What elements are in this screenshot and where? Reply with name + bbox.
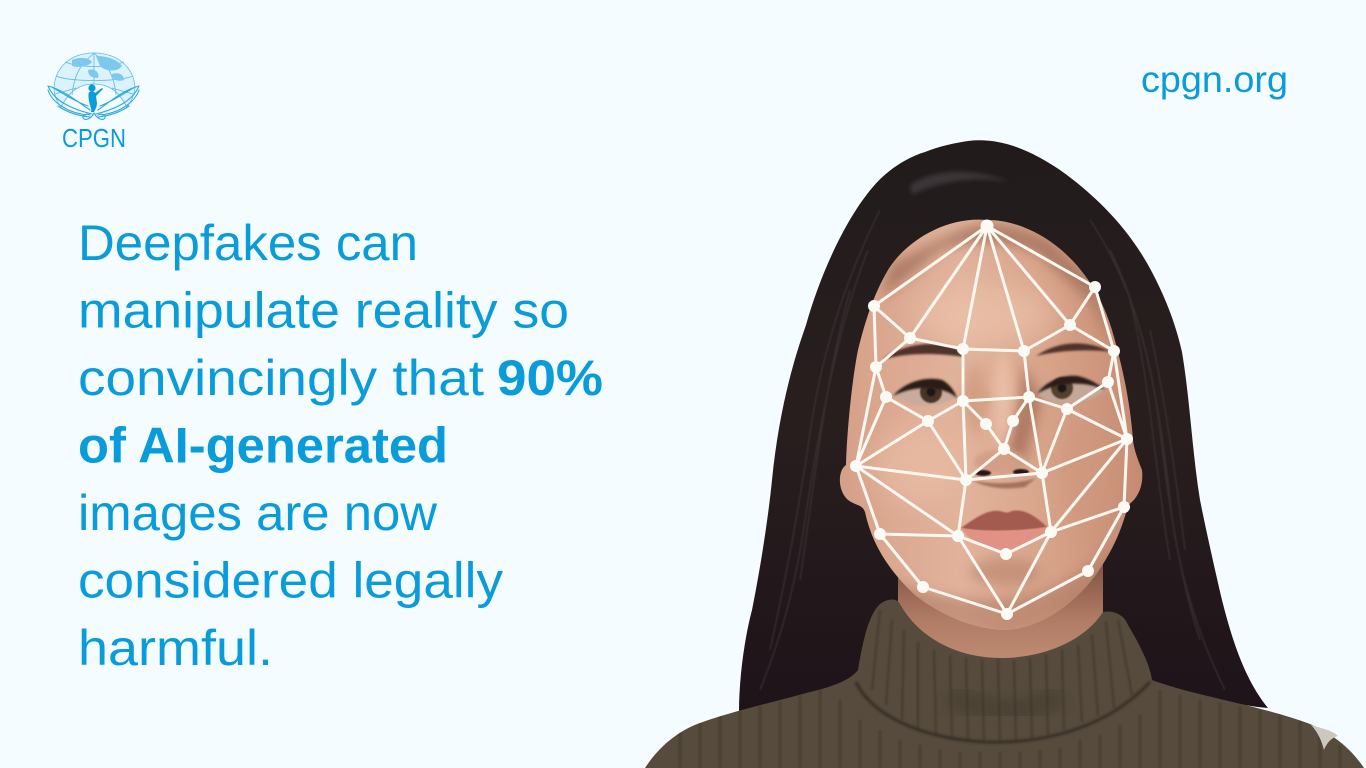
- headline text block: considered legally: [78, 552, 503, 608]
- sweater: [645, 600, 1364, 768]
- eyes: [894, 388, 956, 406]
- headline text block: images are now: [78, 485, 438, 541]
- watermark sparkle: [1311, 725, 1338, 750]
- headline text block: of AI-generated: [78, 418, 448, 474]
- icon: globe: [54, 53, 135, 107]
- facial recognition mesh: [850, 220, 1133, 620]
- icon: child figure: [88, 84, 103, 112]
- neck: [898, 560, 1103, 660]
- headline text block: [78, 215, 603, 676]
- mesh nodes: [850, 220, 1133, 620]
- portrait of a woman: [645, 140, 1364, 768]
- site url: cpgn.org: [1141, 59, 1288, 100]
- headline text block: convincingly that: [78, 350, 484, 406]
- skin shading: [915, 285, 1055, 345]
- headline text block: harmful.: [78, 620, 273, 676]
- logo wordmark: CPGN: [62, 123, 126, 153]
- face: [840, 220, 1142, 640]
- headline text block: 90%: [497, 350, 603, 406]
- lips: [961, 510, 1047, 531]
- hair: [739, 140, 1268, 712]
- eyebrows: [882, 344, 964, 360]
- logo: CPGN globe with wings: [48, 53, 139, 153]
- headline text block: Deepfakes can: [78, 215, 418, 271]
- nose: [974, 450, 1020, 474]
- icon: wings: [48, 86, 139, 119]
- headline text block: manipulate reality so: [78, 282, 569, 338]
- mesh lines: [856, 226, 1127, 614]
